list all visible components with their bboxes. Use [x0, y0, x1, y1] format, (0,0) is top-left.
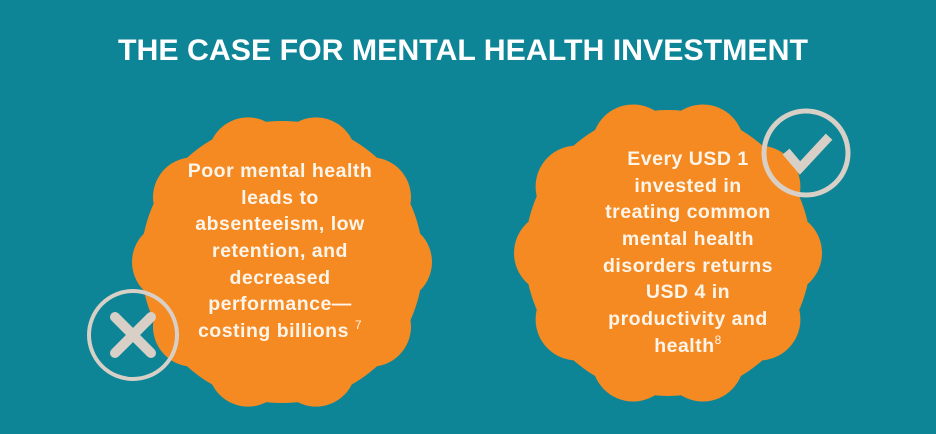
text: right statement: treating common	[605, 201, 771, 223]
panel: right blob	[514, 104, 822, 402]
text: left statement: 7	[355, 318, 362, 332]
text: left statement: retention, and	[212, 240, 348, 262]
text: left statement: leads to	[241, 187, 319, 209]
text: right statement	[603, 148, 773, 357]
text: left statement: absenteeism, low	[195, 213, 365, 235]
icon: check circle	[764, 111, 848, 195]
text: right statement: Every USD 1	[627, 148, 749, 170]
text: right statement: disorders returns	[603, 255, 773, 277]
text: right statement: health	[654, 335, 715, 357]
text: left statement	[188, 160, 372, 342]
text: right statement: productivity and	[608, 308, 768, 330]
text: left statement: decreased	[230, 267, 330, 289]
panel: left blob	[132, 117, 432, 407]
icon: X circle	[89, 291, 177, 379]
text: left statement: costing billions	[198, 320, 349, 342]
title: THE CASE FOR MENTAL HEALTH INVESTMENT	[118, 34, 808, 67]
text: right statement: 8	[715, 333, 722, 347]
text: left statement: performance—	[208, 293, 352, 315]
text: left statement: Poor mental health	[188, 160, 372, 182]
text: right statement: USD 4 in	[646, 281, 730, 303]
text: right statement: invested in	[634, 175, 742, 197]
text: right statement: mental health	[622, 228, 754, 250]
